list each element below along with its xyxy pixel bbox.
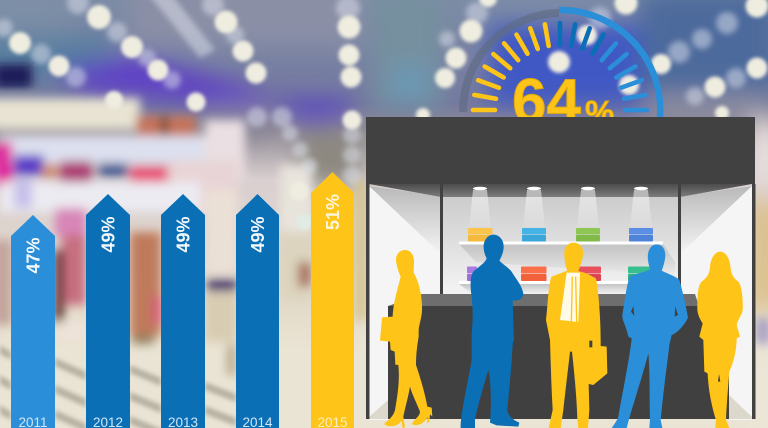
arrow 2014: [236, 194, 279, 428]
man in suit with briefcase: [546, 243, 607, 428]
arrow 2011: [11, 215, 55, 428]
gauge yellow ticks: [473, 24, 549, 110]
booth header: [366, 117, 755, 184]
booth left side wall: [369, 186, 441, 420]
arrow 2015: [311, 172, 354, 428]
store booth: [366, 117, 756, 420]
booth ceiling: [369, 184, 752, 197]
arrow 2011: 47%: [24, 237, 44, 274]
man with crossed arms: [461, 235, 523, 428]
woman standing: [697, 252, 743, 428]
arrow 2012: 49%: [98, 216, 118, 252]
gauge value: 64: [512, 67, 581, 136]
booth right side wall: [680, 186, 752, 420]
gauge progress arc: [559, 10, 660, 117]
counter top: [388, 294, 699, 306]
arrow 2013: 49%: [174, 216, 194, 252]
woman with handbag: [380, 250, 432, 428]
upper shelf: [459, 228, 675, 275]
gauge remainder arc: [463, 13, 559, 112]
arrow 2012: [86, 194, 130, 428]
arrow 2014: 49%: [248, 216, 268, 252]
booth back wall: [440, 190, 682, 370]
lower shelf: [459, 266, 650, 294]
shirt and tie: [560, 273, 580, 322]
gauge: 64%: [463, 10, 660, 136]
arrow 2013: [161, 194, 205, 428]
man with hands in pockets: [612, 244, 688, 428]
people silhouettes: [380, 235, 743, 428]
counter front: [388, 306, 729, 419]
gauge blue ticks: [560, 23, 647, 110]
spot lights: [469, 187, 652, 227]
floor wedges: [369, 395, 752, 419]
arrow bar chart: [11, 172, 354, 428]
booth posts: [366, 184, 756, 419]
arrow 2015: 51%: [323, 194, 343, 230]
gauge value: %: [585, 94, 614, 131]
